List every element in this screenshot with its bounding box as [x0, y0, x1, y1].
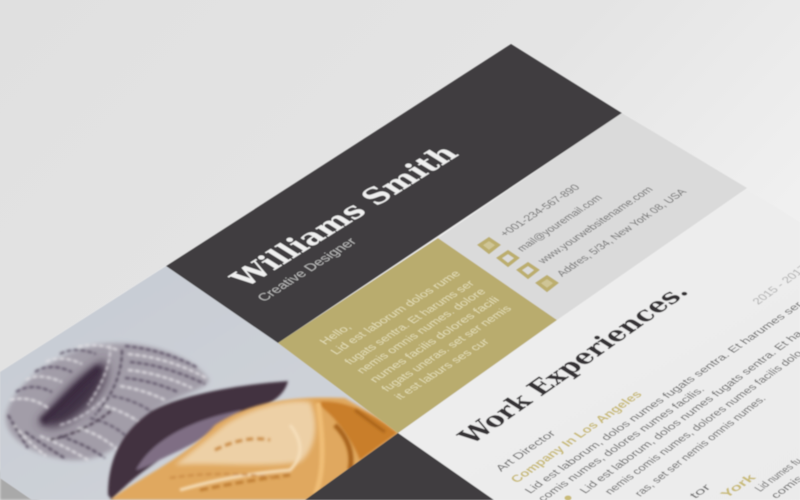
photo: dark scarf — [108, 381, 288, 500]
text block: contact details: www.yourwebsitename.com — [534, 184, 656, 266]
text block: introduction — [317, 269, 514, 401]
panel: photo — [0, 260, 400, 500]
text block: contact details: +001-234-567-890 — [497, 182, 583, 238]
job role: Art Director — [493, 428, 559, 473]
text block: introduction: nemis omnis numes. dolore — [354, 286, 489, 375]
icon: phone — [480, 239, 498, 252]
second job role: tor — [687, 482, 714, 500]
job description: ras, set ser nemis omnis numes. — [632, 394, 769, 498]
panel: gold introduction — [278, 238, 557, 433]
panel: dark lower sidebar — [305, 433, 494, 500]
heading: work experiences: Work Experiences. — [450, 279, 695, 449]
second company name: York — [717, 471, 759, 500]
title: name: Williams Smith — [222, 140, 466, 292]
text block: job one — [493, 300, 800, 500]
text block: introduction: numes facilis dolores facili — [367, 295, 502, 384]
paper shadow at lower left — [0, 470, 40, 500]
photo backdrop — [0, 260, 400, 500]
second job description — [752, 456, 800, 500]
icon: mail — [499, 252, 517, 265]
text block: contact details: Addres, 5/34, New York 08, USA — [554, 186, 690, 278]
gold marker — [564, 496, 572, 500]
panel: gray contact strip — [438, 113, 747, 320]
icon: website — [519, 264, 537, 277]
photo: knit hat — [6, 343, 209, 460]
icon: address — [538, 277, 556, 290]
text block: introduction: Lid est laborum dolos rume — [328, 269, 463, 356]
photo: mustard coat — [110, 397, 400, 500]
text block: introduction: fugats uneras. set ser nemis — [379, 304, 514, 393]
company name: Company In Los Angeles — [507, 388, 645, 485]
text block: introduction: it est laburs ses cur — [392, 337, 492, 401]
text block: job two — [687, 456, 800, 500]
text block: introduction: Hello, — [317, 322, 354, 346]
contact icons — [480, 239, 556, 290]
text block: contact details: mail@youremail.com — [514, 193, 605, 253]
text block: contact details — [497, 182, 690, 278]
text block: introduction: fugats sentra. Et harums ser — [342, 279, 477, 366]
job description: comis numes, dolores numes facilis. — [535, 385, 708, 500]
panel: dark name header — [166, 44, 622, 343]
subtitle: job title: Creative Designer — [255, 236, 360, 304]
